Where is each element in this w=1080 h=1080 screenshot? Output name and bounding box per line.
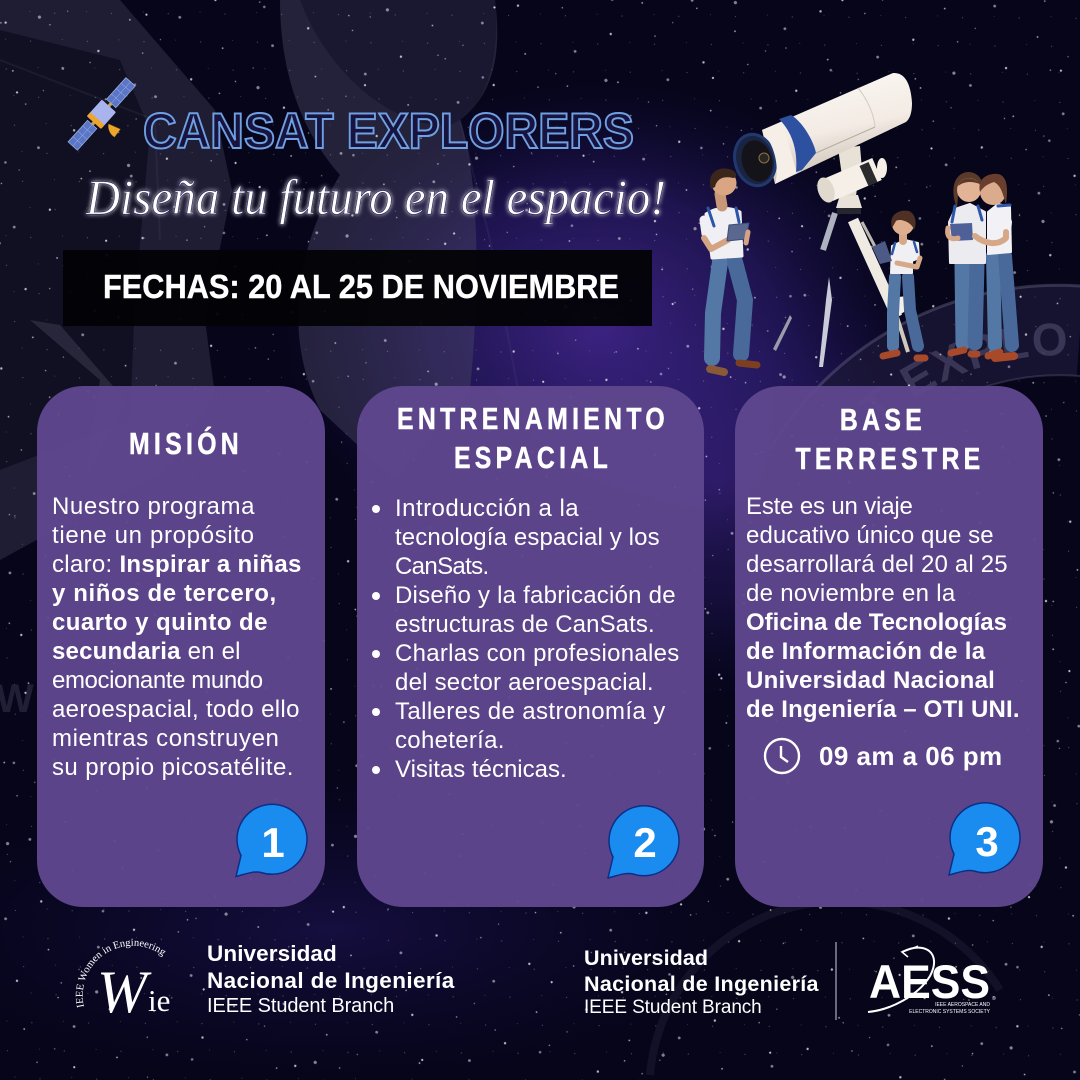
heading: base: BASE: [840, 402, 926, 437]
logo: IEEE Women in Engineering: IEEE Women in Engineering: [76, 938, 166, 1008]
text: UNI IEEE student branch left: [207, 941, 455, 1017]
heading: entrenamiento espacial: [397, 401, 669, 475]
text block: base terrestre: Este es un viaje: [746, 493, 913, 520]
text block: base terrestre: educativo único que se: [746, 522, 994, 549]
logo: AESS: AESS: [869, 955, 990, 1008]
text: UNI IEEE student branch right: [584, 946, 819, 1018]
text block: mision: [52, 493, 302, 781]
list: training topics: Introducción a la: [395, 495, 579, 522]
logo: AESS: [836, 942, 996, 1020]
list: training topics: CanSats.: [395, 553, 489, 580]
tagline: Diseña tu futuro en el espacio!: [85, 169, 666, 225]
list: training topics: cohetería.: [395, 727, 505, 754]
text block: base terrestre: Oficina de Tecnologías: [746, 609, 1007, 636]
heading: mision: MISIÓN: [129, 426, 243, 461]
text block: base terrestre: de Información de la: [746, 638, 985, 665]
schedule: hours: [764, 738, 1003, 774]
logo: IEEE Women in Engineering: ie: [148, 983, 170, 1018]
text block: base terrestre: Universidad Nacional: [746, 667, 995, 694]
list: training topics: [372, 495, 680, 783]
heading: terrestre: TERRESTRE: [795, 441, 985, 476]
header: logo, title, tagline: [68, 77, 667, 228]
text block: mision: su propio picosatélite.: [52, 754, 294, 781]
text block: mision: emocionante mundo: [52, 667, 263, 694]
text: UNI IEEE student branch left: IEEE Student Branch: [207, 995, 394, 1017]
text: UNI IEEE student branch right: Universidad: [584, 946, 708, 970]
illustration: telescope and students: [700, 73, 1019, 376]
text block: mision: cuarto y quinto de: [52, 609, 268, 636]
panel: base terrestre: [735, 386, 1043, 907]
date banner: [63, 250, 652, 326]
panel: mision: [37, 386, 325, 907]
text block: mision: aeroespacial, todo ello: [52, 696, 300, 723]
text: UNI IEEE student branch left: Universidad: [207, 941, 337, 966]
text block: base terrestre: desarrollará del 20 al 25: [746, 551, 1008, 578]
list: training topics: Visitas técnicas.: [395, 756, 567, 783]
icon: number bubble 1: 1: [261, 819, 285, 866]
hours text: 09 am a 06 pm: [819, 741, 1003, 771]
logo: AESS: IEEE AEROSPACE AND: [935, 1002, 990, 1008]
text: UNI IEEE student branch right: Nacional de Ingeniería: [584, 972, 819, 996]
list: training topics: del sector aeroespacial.: [395, 669, 654, 696]
icon: number bubble 2: [607, 805, 680, 879]
panel: entrenamiento espacial: [357, 386, 704, 907]
text block: mision: Nuestro programa: [52, 493, 255, 520]
student 4: [975, 174, 1014, 358]
telescope: [729, 73, 912, 367]
icon: number bubble 1: [235, 804, 308, 878]
text block: mision: y niños de tercero,: [52, 580, 277, 607]
icon: clock: [764, 738, 800, 774]
list: training topics: Talleres de astronomía y: [395, 698, 666, 725]
student 2: [872, 211, 925, 358]
list: training topics: Diseño y la fabricación de: [395, 582, 676, 609]
logo: AESS: ELECTRONIC SYSTEMS SOCIETY: [909, 1009, 991, 1015]
icon: number bubble 3: [948, 802, 1021, 876]
list: training topics: Charlas con profesionales: [395, 640, 680, 667]
logo: AESS: ®: [992, 995, 996, 1002]
icon: number bubble 3: 3: [975, 818, 999, 865]
heading: entrenamiento espacial: ENTRENAMIENTO: [397, 401, 669, 436]
list: training topics: estructuras de CanSats.: [395, 611, 655, 638]
text block: base terrestre: de noviembre en la: [746, 580, 956, 607]
date banner: FECHAS: 20 AL 25 DE NOVIEMBRE: [103, 268, 619, 305]
text block: mision: mientras construyen: [52, 725, 280, 752]
text block: base terrestre: de Ingeniería – OTI UNI.: [746, 696, 1020, 723]
text block: mision: secundaria en el: [52, 638, 241, 665]
list: training topics: tecnología espacial y los: [395, 524, 660, 551]
icon: satellite: [66, 75, 138, 153]
text block: mision: claro: Inspirar a niñas: [52, 551, 302, 578]
heading: entrenamiento espacial: ESPACIAL: [454, 440, 612, 475]
icon: number bubble 2: 2: [633, 819, 657, 866]
text block: mision: tiene un propósito: [52, 522, 255, 549]
student 3: [948, 172, 985, 354]
text: UNI IEEE student branch right: IEEE Student Branch: [584, 997, 762, 1018]
title: CANSAT EXPLORERS: [143, 103, 634, 159]
student 1: [704, 168, 757, 372]
text block: base terrestre: [746, 493, 1020, 723]
text: UNI IEEE student branch left: Nacional de Ingeniería: [207, 968, 455, 993]
